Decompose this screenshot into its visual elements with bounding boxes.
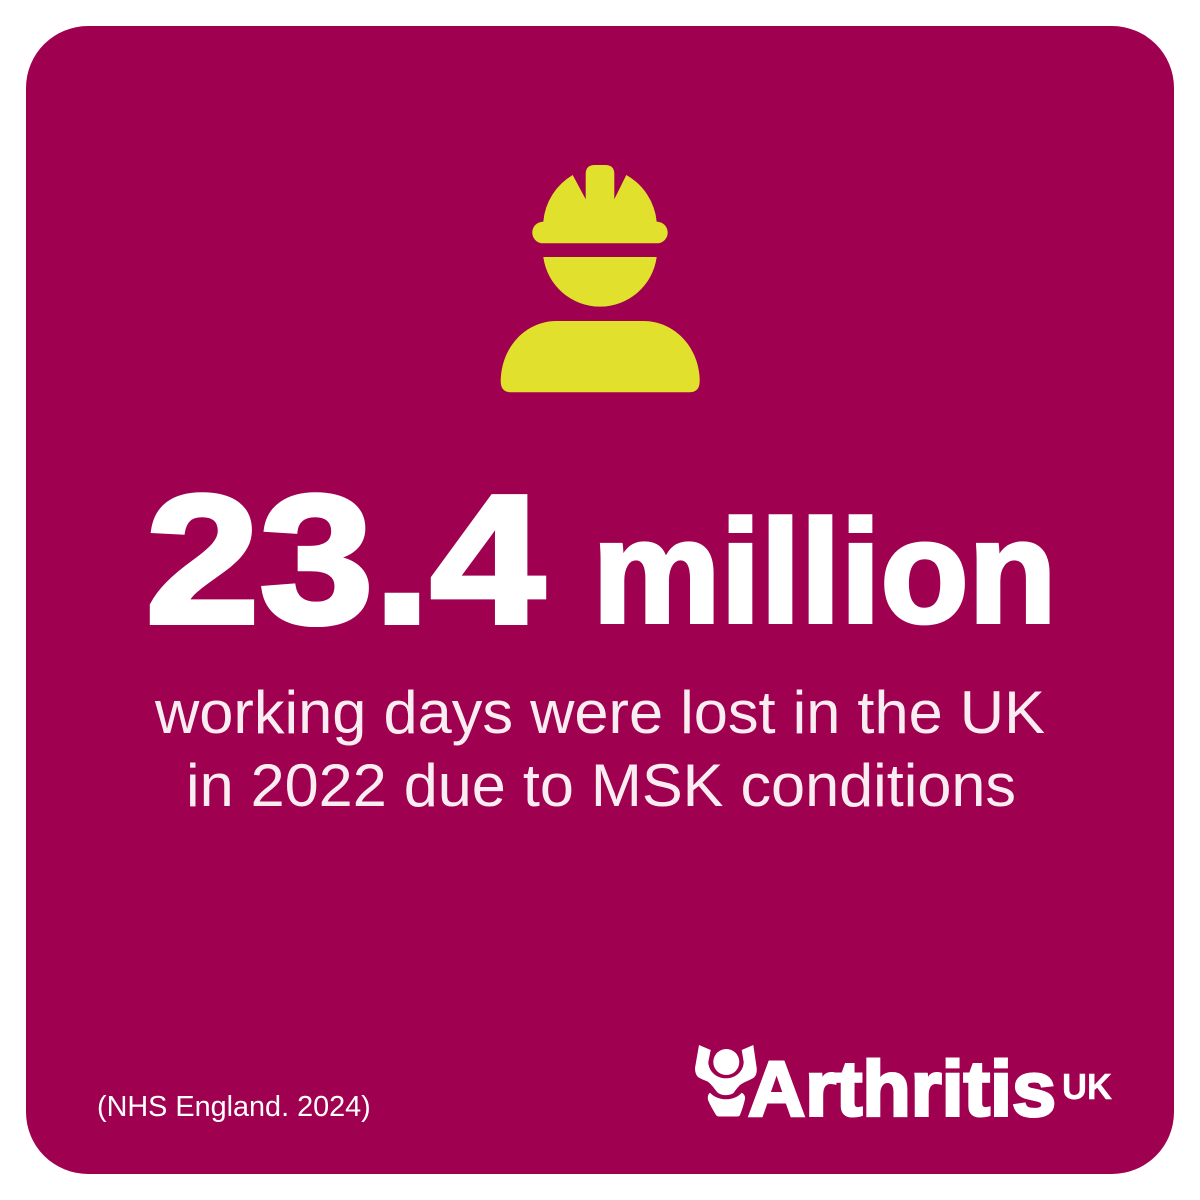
logo suffix: UK: UK (1062, 1066, 1112, 1107)
icon: hard hat (532, 165, 668, 243)
headline statistic (146, 456, 1056, 662)
description text (154, 679, 1045, 819)
unit: million: million (592, 490, 1056, 653)
description line 2: in 2022 due to MSK conditions (186, 752, 1016, 819)
number: 23.4: 23.4 (146, 456, 544, 662)
icon: construction worker (501, 165, 700, 392)
logo icon: figure with raised arms (695, 1045, 757, 1116)
logo wordmark: Arthritis (748, 1044, 1056, 1132)
icon: worker shoulders (501, 321, 700, 392)
source citation: (NHS England. 2024) (97, 1091, 371, 1123)
icon: worker head (543, 257, 657, 307)
description line 1: working days were lost in the UK (154, 679, 1045, 746)
logo: Arthritis UK (695, 1044, 1112, 1132)
